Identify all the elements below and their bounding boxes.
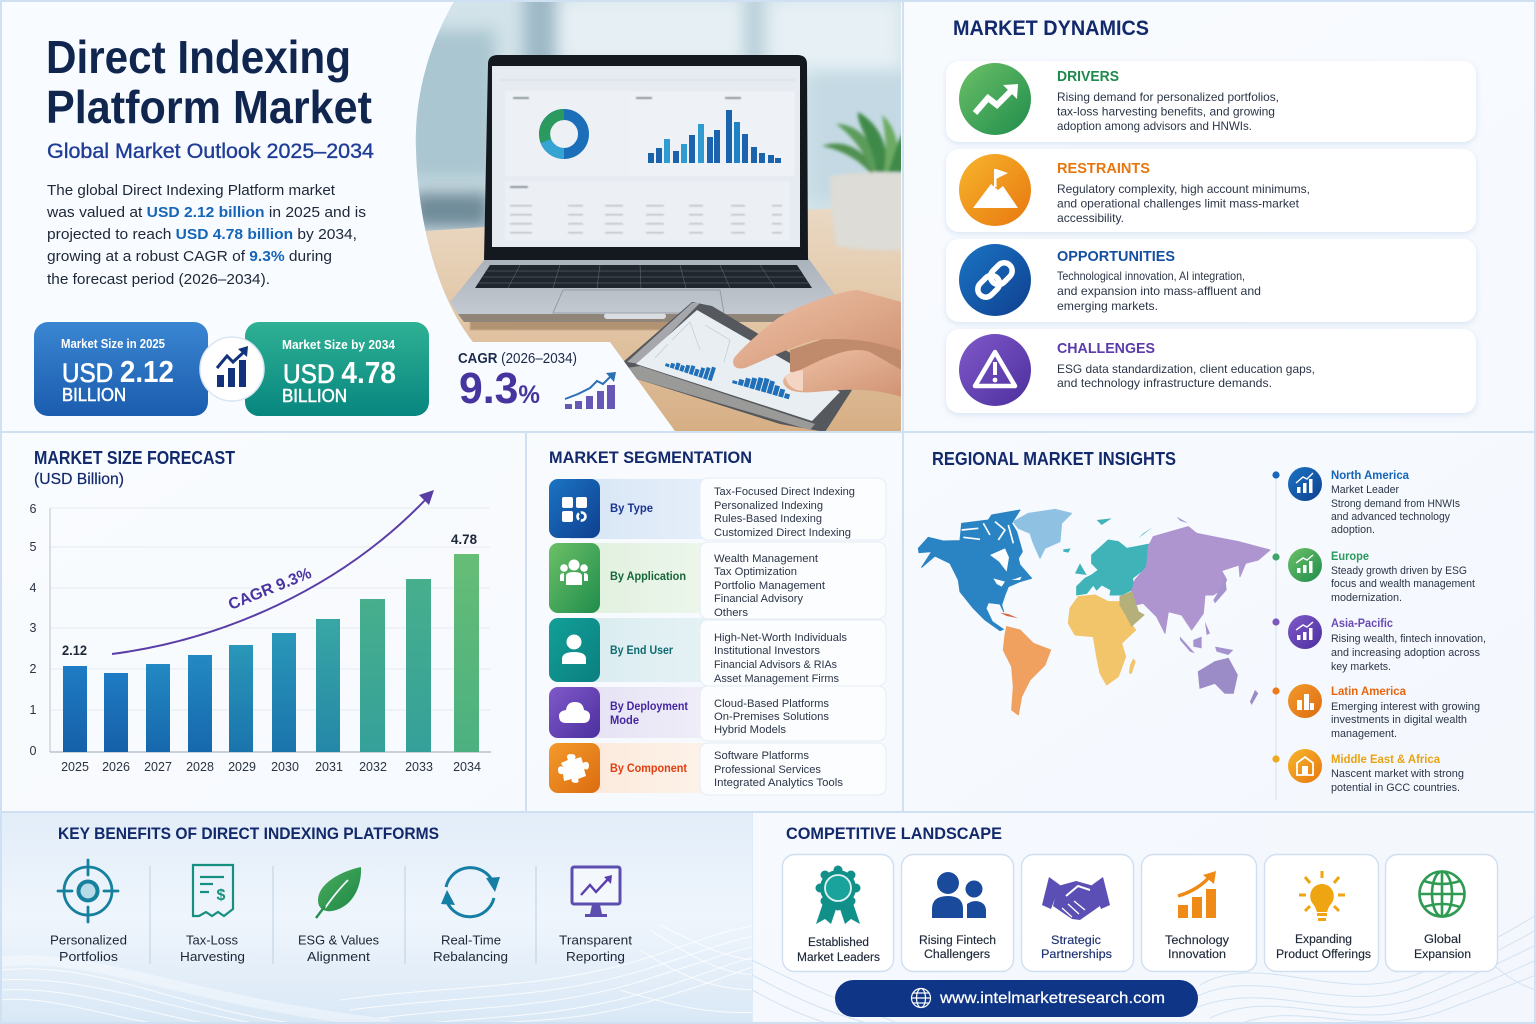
website pill: www.intelmarketresearch.com: [939, 990, 1165, 1007]
benefit: tax-loss harvesting: Tax-Loss: [186, 934, 238, 948]
card: drivers: Rising demand for personalized portfolios,: [1057, 91, 1279, 104]
region: europe: [1288, 548, 1475, 604]
intro paragraph: [46, 182, 366, 288]
card: market size 2034: [245, 322, 429, 416]
card: technology innovation: [1142, 854, 1256, 972]
card: strategic partnerships: Partnerships: [1041, 947, 1112, 961]
heading: forecast: [34, 448, 235, 488]
world map: [918, 509, 1270, 715]
card: rising fintech challengers: Rising Fintech: [919, 933, 996, 947]
benefit: personalized portfolios: Portfolios: [59, 950, 118, 964]
region: latin america: Latin America: [1331, 686, 1407, 698]
panel: competitive landscape: [752, 825, 1536, 1024]
icon: light bulb: [1299, 871, 1345, 921]
intro paragraph: the forecast period (2026–2034).: [47, 271, 270, 288]
card: market size 2025: USD 2.12: [62, 354, 174, 389]
region: north america: Strong demand from HNWIs: [1331, 498, 1461, 510]
subtitle: Global Market Outlook 2025–2034: [47, 140, 374, 163]
region: asia-pacific: [1288, 615, 1486, 673]
bar chart: 6: [30, 502, 37, 516]
card: market size 2034: Market Size by 2034: [282, 338, 395, 352]
region: latin america: investments in digital wealth: [1331, 714, 1467, 726]
title: [46, 31, 372, 133]
icon: by application: [549, 543, 600, 613]
row: by component: Integrated Analytics Tools: [714, 777, 843, 789]
icon: monitor: [572, 867, 620, 917]
card: drivers: adoption among advisors and HNWIs.: [1057, 120, 1252, 133]
row: by type: Rules-Based Indexing: [714, 513, 822, 525]
bar chart: 2: [30, 662, 37, 676]
intro paragraph: projected to reach USD 4.78 billion by 2034,: [47, 226, 357, 243]
icon: growth: [1178, 871, 1216, 918]
row: by end user: Financial Advisors & RIAs: [714, 659, 837, 671]
region: europe: focus and wealth management: [1331, 578, 1475, 590]
benefit: personalized portfolios: [50, 860, 127, 964]
bar chart: 1: [30, 703, 37, 717]
panel: market dynamics: [946, 17, 1476, 413]
row: by end user: By End User: [610, 643, 673, 657]
card: market size 2025: Market Size in 2025: [61, 337, 165, 351]
region: middle east and africa: potential in GCC countries.: [1331, 782, 1460, 794]
card: global expansion: Global: [1424, 932, 1461, 946]
row: by component: By Component: [610, 761, 687, 775]
region: middle east and africa: [1288, 749, 1464, 794]
card: market size 2025: [34, 322, 208, 416]
card: opportunities: Technological innovation, AI integration,: [1057, 270, 1245, 283]
region: asia-pacific: Asia-Pacific: [1331, 618, 1394, 630]
card: rising fintech challengers: Challengers: [924, 947, 990, 961]
timeline: [1272, 471, 1280, 800]
row: by application: Tax Optimization: [714, 566, 797, 578]
region: north america: adoption.: [1331, 524, 1375, 536]
website pill: [835, 980, 1198, 1017]
icon: CAGR growth bars: [565, 372, 616, 409]
benefit: tax-loss harvesting: [180, 865, 245, 964]
icon: by component: [549, 743, 600, 793]
region: north america: Market Leader: [1331, 484, 1399, 496]
region: asia-pacific: key markets.: [1331, 661, 1391, 673]
card: strategic partnerships: [1022, 854, 1134, 972]
icon: by deployment mode: [549, 687, 600, 738]
title: Platform Market: [46, 81, 372, 133]
card: opportunities: [946, 239, 1476, 322]
row: by deployment mode: On-Premises Solutions: [714, 711, 829, 723]
benefit: real-time rebalancing: [433, 868, 508, 964]
panel: regional market insights: [918, 449, 1486, 800]
CAGR callout: CAGR (2026–2034): [458, 351, 577, 367]
card: restraints: RESTRAINTS: [1057, 160, 1150, 177]
card: strategic partnerships: Strategic: [1051, 933, 1101, 947]
region: north america: North America: [1331, 470, 1410, 482]
region: north america: [1288, 467, 1461, 536]
row: by deployment mode: Hybrid Models: [714, 724, 786, 736]
bar chart: 2026: [102, 760, 130, 774]
card: established market leaders: Market Leaders: [797, 950, 880, 964]
region: middle east and africa: Middle East & Africa: [1331, 754, 1441, 766]
dividers: [150, 866, 536, 964]
bar chart: 3: [30, 621, 37, 635]
bar chart: 2029: [228, 760, 256, 774]
benefit: transparent reporting: Transparent: [559, 934, 633, 948]
benefit: ESG alignment: [298, 867, 379, 964]
card: drivers: [946, 61, 1476, 142]
CAGR callout: [458, 351, 616, 413]
card: technology innovation: Technology: [1165, 933, 1230, 947]
tablet: [623, 302, 852, 432]
bar chart: 4: [30, 581, 37, 595]
card: challenges: ESG data standardization, client education gaps,: [1057, 363, 1315, 376]
row: by application: Wealth Management: [714, 553, 819, 565]
region: latin america: management.: [1331, 728, 1397, 740]
row: by application: Financial Advisory: [714, 593, 803, 605]
benefit: personalized portfolios: Personalized: [50, 934, 127, 948]
row: by application: [549, 542, 886, 619]
card: challenges: and technology infrastructure demands.: [1057, 377, 1272, 390]
icon: asia-pacific: [1288, 615, 1322, 649]
row: by deployment mode: [549, 686, 886, 741]
card: expanding product offerings: [1264, 854, 1378, 972]
icon: leaf: [316, 867, 361, 918]
card: opportunities: and expansion into mass-affluent and: [1057, 285, 1261, 298]
intro paragraph: The global Direct Indexing Platform market: [47, 182, 336, 199]
row: by component: Software Platforms: [714, 750, 809, 762]
bar chart: 2031: [315, 760, 343, 774]
heading: forecast: MARKET SIZE FORECAST: [34, 448, 235, 468]
bar chart: CAGR 9.3%: [226, 565, 314, 614]
region: middle east and africa: Nascent market with strong: [1331, 768, 1464, 780]
photo: laptop and tablet on desk: [405, 0, 910, 432]
region: asia-pacific: and increasing adoption across: [1331, 647, 1481, 659]
heading: benefits: KEY BENEFITS OF DIRECT INDEXING PLATFORMS: [58, 825, 439, 843]
bar chart: 2032: [359, 760, 387, 774]
intro paragraph: growing at a robust CAGR of 9.3% during: [47, 248, 332, 265]
card: established market leaders: Established: [808, 935, 869, 949]
card: global expansion: Expansion: [1414, 947, 1471, 961]
icon: globe: [1420, 871, 1464, 917]
card: rising fintech challengers: [902, 854, 1014, 972]
icon: handshake: [1042, 877, 1110, 920]
icon: website globe: [912, 988, 930, 1008]
benefit: ESG alignment: ESG & Values: [298, 934, 379, 948]
laptop lid: [484, 55, 808, 260]
row: by deployment mode: By Deployment: [610, 699, 688, 713]
icon: challenges: [959, 334, 1031, 406]
heading: competitive: COMPETITIVE LANDSCAPE: [786, 825, 1002, 843]
row: by end user: Asset Management Firms: [714, 673, 839, 685]
icon: latin america: [1288, 684, 1322, 718]
card: challenges: CHALLENGES: [1057, 340, 1155, 357]
row: by type: By Type: [610, 501, 653, 515]
row: by type: Personalized Indexing: [714, 500, 823, 512]
region: latin america: Emerging interest with growing: [1331, 701, 1480, 713]
icon: drivers: [959, 63, 1031, 135]
icon: by type: [549, 479, 600, 538]
icon: middle east and africa: [1288, 749, 1322, 783]
card: expanding product offerings: Product Offerings: [1276, 947, 1371, 961]
region: north america: and advanced technology: [1331, 511, 1451, 523]
laptop screen: [492, 66, 800, 247]
card: challenges: [946, 329, 1476, 413]
region: asia-pacific: Rising wealth, fintech innovation,: [1331, 633, 1486, 645]
card: drivers: DRIVERS: [1057, 68, 1119, 85]
bar chart: 4.78: [451, 531, 477, 547]
icon: refresh arrows: [441, 868, 500, 917]
row: by component: [549, 743, 886, 795]
card: restraints: [946, 149, 1476, 232]
card: opportunities: OPPORTUNITIES: [1057, 248, 1175, 265]
benefit: real-time rebalancing: Real-Time: [441, 934, 501, 948]
intro paragraph: was valued at USD 2.12 billion in 2025 and is: [46, 204, 366, 221]
bar chart: 2027: [144, 760, 172, 774]
row: by application: Portfolio Management: [714, 580, 826, 592]
bar chart: 2033: [405, 760, 433, 774]
icon: rosette: [816, 866, 860, 924]
card: drivers: tax-loss harvesting benefits, and growing: [1057, 106, 1275, 118]
heading: segmentation: MARKET SEGMENTATION: [549, 448, 752, 467]
benefit: transparent reporting: Reporting: [566, 950, 625, 964]
panel: market segmentation: [549, 448, 886, 795]
panel: market size forecast: [30, 448, 491, 774]
region: europe: Europe: [1331, 551, 1369, 563]
row: by application: By Application: [610, 569, 686, 583]
card: technology innovation: Innovation: [1168, 947, 1226, 961]
card: restraints: Regulatory complexity, high account minimums,: [1057, 183, 1310, 196]
row: by end user: [549, 618, 886, 686]
bar chart: 2034: [453, 760, 481, 774]
plant: [822, 112, 905, 250]
row: by deployment mode: Cloud-Based Platforms: [714, 698, 829, 710]
card: global expansion: [1386, 854, 1498, 972]
row: by application: Others: [714, 607, 748, 619]
title: Direct Indexing: [46, 31, 351, 83]
icon: target: [58, 860, 118, 922]
row: by type: [549, 478, 886, 540]
icon: receipt: $: [217, 887, 226, 904]
card: expanding product offerings: Expanding: [1295, 932, 1352, 946]
benefit: tax-loss harvesting: Harvesting: [180, 950, 245, 964]
hand: [733, 290, 905, 398]
card: restraints: and operational challenges limit mass-market: [1057, 198, 1300, 210]
region: europe: Steady growth driven by ESG: [1331, 565, 1467, 577]
icon: europe: [1288, 548, 1322, 582]
arrow: CAGR trend: [112, 490, 434, 654]
card: opportunities: emerging markets.: [1057, 300, 1158, 313]
benefit: ESG alignment: Alignment: [307, 950, 371, 964]
icon: north america: [1288, 467, 1322, 501]
benefit: real-time rebalancing: Rebalancing: [433, 950, 508, 964]
heading: market dynamics: MARKET DYNAMICS: [953, 17, 1149, 40]
icon: by end user: [549, 618, 600, 682]
region: latin america: [1288, 684, 1480, 740]
panel: key benefits: [0, 812, 760, 1024]
CAGR callout: 9.3%: [459, 364, 540, 413]
benefit: transparent reporting: [559, 867, 633, 964]
panel: hero: [2, 0, 910, 432]
card: market size 2025: BILLION: [62, 385, 126, 405]
card: market size 2034: USD 4.78: [283, 355, 396, 390]
icon: growth circle: [200, 337, 264, 401]
row: by type: Tax-Focused Direct Indexing: [714, 486, 855, 498]
bar chart: [30, 490, 491, 774]
bar chart: 5: [30, 540, 37, 554]
laptop base: [450, 258, 835, 320]
bar chart: 2025: [61, 760, 89, 774]
region: europe: modernization.: [1331, 592, 1402, 604]
heading: forecast: (USD Billion): [34, 471, 124, 488]
card: established market leaders: [782, 854, 894, 972]
row: by type: Customized Direct Indexing: [714, 527, 851, 539]
row: by deployment mode: Mode: [610, 713, 639, 727]
row: by component: Professional Services: [714, 764, 821, 776]
icon: people: [932, 872, 986, 918]
icon: opportunities: [959, 244, 1031, 316]
row: by end user: Institutional Investors: [714, 645, 820, 657]
bar chart: 0: [30, 744, 37, 758]
bar chart: 2.12: [62, 642, 87, 658]
bar chart: 2030: [271, 760, 299, 774]
icon: restraints: [959, 154, 1031, 226]
row: by end user: High-Net-Worth Individuals: [714, 632, 847, 644]
card: market size 2034: BILLION: [282, 386, 347, 406]
card: restraints: accessibility.: [1057, 212, 1124, 225]
bar chart: 2028: [186, 760, 214, 774]
heading: regional: REGIONAL MARKET INSIGHTS: [932, 449, 1176, 469]
